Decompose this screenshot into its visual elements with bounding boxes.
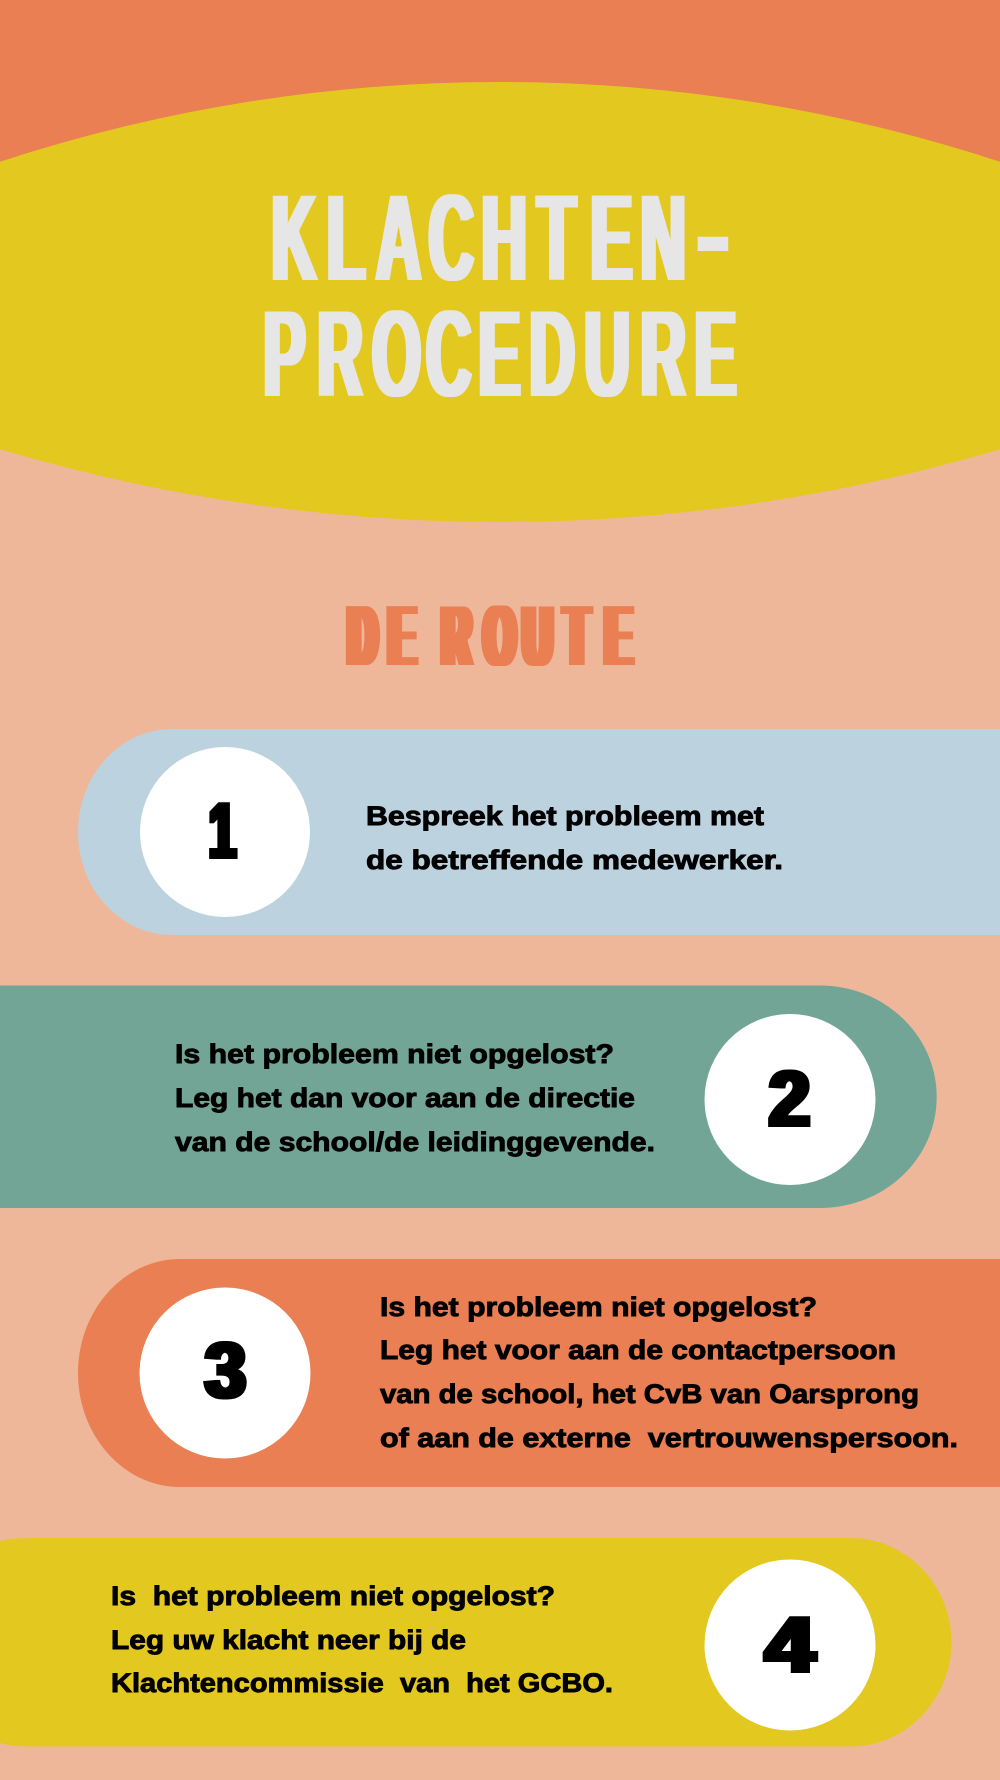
step 2 number: 2 — [769, 1054, 810, 1142]
panel: step 2 — [0, 986, 937, 1208]
step 1 text — [366, 801, 783, 875]
step 2 number circle — [704, 1014, 876, 1185]
panel: step 1 — [78, 729, 1000, 935]
title — [264, 167, 736, 424]
step 1 text: de betreffende medewerker. — [366, 845, 783, 875]
step 3 number circle — [140, 1288, 310, 1458]
title: KLACHTEN — [272, 168, 686, 308]
step 2 text: Is het probleem niet opgelost? — [175, 1039, 614, 1069]
step 3 number: 3 — [205, 1326, 246, 1414]
step 4 number: 4 — [765, 1600, 815, 1688]
header lens shape — [0, 82, 1000, 522]
header band — [0, 0, 1000, 305]
step 2 text: van de school/de leidinggevende. — [175, 1127, 655, 1157]
step 2 background — [0, 986, 937, 1208]
step 1 number circle — [140, 747, 310, 917]
step 4 number circle — [704, 1560, 876, 1730]
step 4 text: Is het probleem niet opgelost? — [111, 1581, 555, 1611]
step 4 text: Klachtencommissie van het GCBO. — [111, 1668, 613, 1698]
step 2 text — [175, 1039, 655, 1157]
step 3 text: van de school, het CvB van Oarsprong — [380, 1379, 919, 1409]
step 4 background — [0, 1538, 952, 1746]
step 1 text: Bespreek het probleem met — [366, 801, 764, 831]
step 1 number: 1 — [209, 786, 236, 874]
step 4 text — [111, 1581, 613, 1698]
step 3 text: of aan de externe vertrouwenspersoon. — [380, 1423, 958, 1453]
heading: de route: DE ROUTE — [348, 587, 632, 685]
panel: step 3 — [78, 1259, 1000, 1487]
step 3 background — [78, 1259, 1000, 1487]
title: - — [693, 167, 733, 301]
step 3 text — [380, 1292, 958, 1453]
title: PROCEDURE — [264, 284, 736, 424]
step 3 text: Leg het voor aan de contactpersoon — [380, 1335, 896, 1365]
step 4 text: Leg uw klacht neer bij de — [111, 1625, 466, 1655]
step 3 text: Is het probleem niet opgelost? — [380, 1292, 817, 1322]
step 1 background — [78, 729, 1000, 935]
step 2 text: Leg het dan voor aan de directie — [175, 1083, 635, 1113]
panel: step 4 — [0, 1538, 952, 1746]
